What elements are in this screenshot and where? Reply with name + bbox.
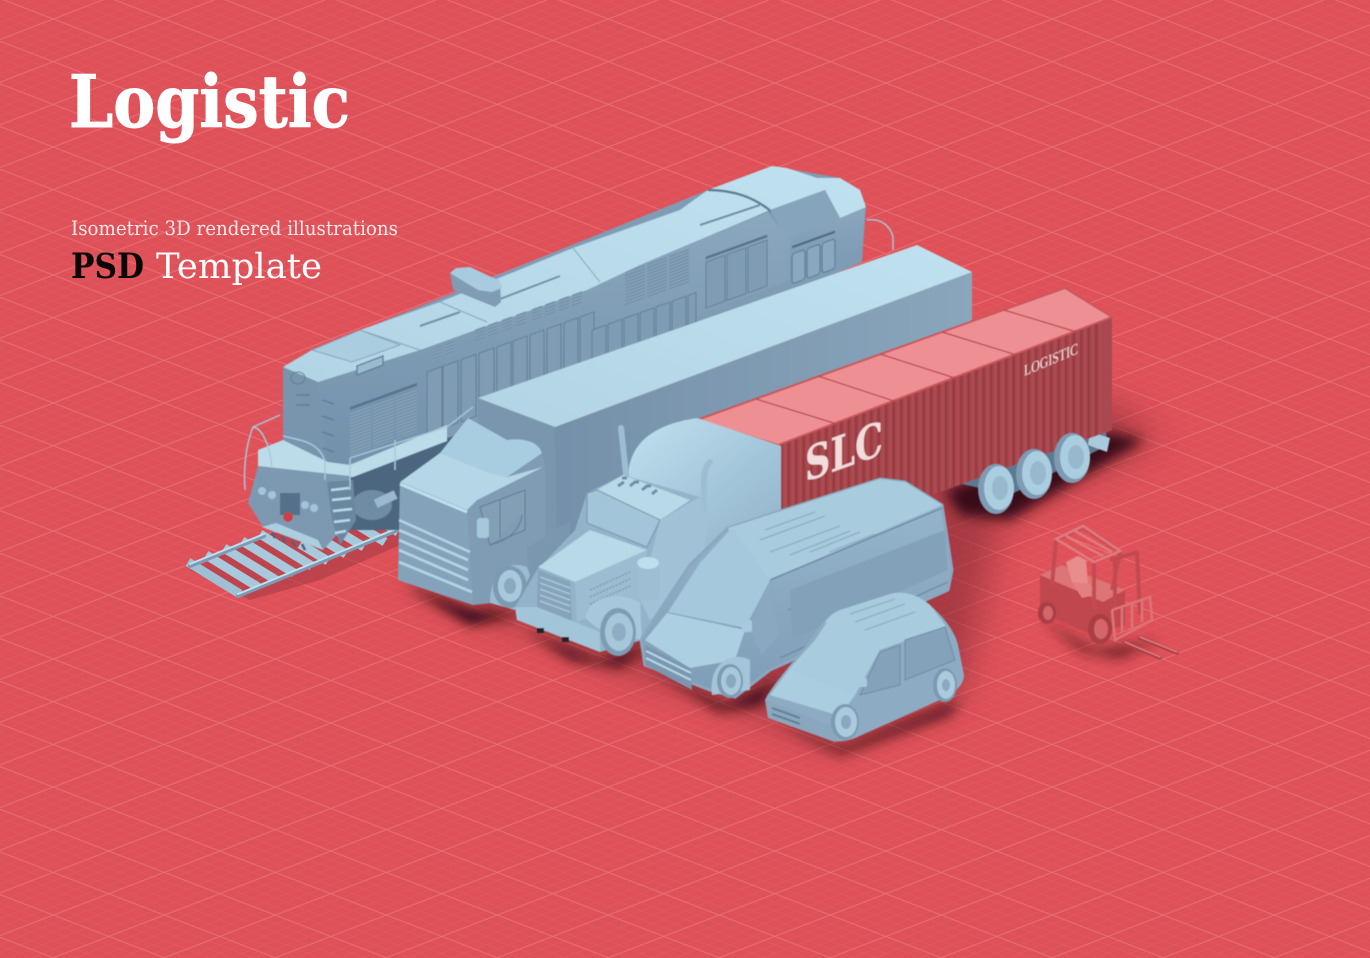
hood side bbox=[575, 550, 647, 622]
seat bbox=[1066, 556, 1098, 598]
mast bbox=[1110, 552, 1140, 625]
hood bbox=[538, 530, 647, 582]
windshield bbox=[790, 622, 880, 695]
chassis bbox=[1040, 565, 1125, 635]
track rails bbox=[190, 528, 398, 596]
cab side bbox=[640, 497, 708, 620]
fuel tank bbox=[637, 557, 659, 600]
cab fender and wheel bbox=[490, 565, 530, 610]
trailer side bbox=[555, 272, 972, 600]
loco front louvres bbox=[350, 383, 417, 456]
front bbox=[765, 700, 838, 742]
loco roof bbox=[283, 166, 866, 382]
cab front bbox=[398, 482, 473, 605]
wheel and fender bbox=[585, 596, 642, 656]
side panel highlight bbox=[790, 530, 948, 640]
cab visor bbox=[400, 484, 467, 512]
loco upper louvres bbox=[625, 249, 689, 306]
front wheel bbox=[1088, 614, 1112, 644]
cab backing silhouette bbox=[398, 418, 545, 605]
forklift bbox=[1038, 526, 1177, 658]
hood bbox=[770, 668, 855, 716]
loco cab windows bbox=[792, 231, 835, 284]
side windows and doors bbox=[860, 627, 955, 695]
side ridge bbox=[770, 508, 948, 658]
grille bbox=[537, 570, 572, 623]
heading: PSD Template: Template bbox=[156, 247, 322, 287]
loco mid doors bbox=[706, 235, 767, 308]
tractor sleeper cab bbox=[628, 418, 781, 600]
railway track bbox=[188, 515, 400, 600]
large van bbox=[641, 479, 952, 698]
canopy bbox=[1052, 527, 1120, 610]
windshield bbox=[587, 490, 660, 547]
trailer roof bbox=[478, 245, 972, 427]
loco door panels bbox=[427, 312, 594, 434]
cab side bbox=[467, 468, 545, 605]
wheels bbox=[831, 668, 957, 740]
loco exhaust housing bbox=[450, 267, 502, 307]
track sleepers bbox=[188, 516, 398, 594]
loco cab rear side bbox=[680, 207, 865, 312]
container truck bbox=[628, 288, 1112, 600]
container end post bbox=[1102, 317, 1112, 434]
bumper bbox=[515, 607, 600, 652]
container label: SLC: SLC bbox=[805, 410, 883, 494]
canopy top bars bbox=[1056, 526, 1120, 562]
container side bbox=[778, 317, 1112, 552]
loco pilot front bbox=[248, 466, 356, 550]
subtitle: Isometric 3D rendered illustrations bbox=[71, 217, 398, 240]
windshield bbox=[668, 528, 770, 628]
wheel bbox=[712, 657, 750, 698]
rear wheel bbox=[1038, 602, 1056, 624]
exhaust stacks bbox=[621, 428, 710, 530]
loco front face bbox=[283, 367, 328, 470]
cab mirror bbox=[477, 518, 489, 538]
container label: LOGISTIC: LOGISTIC bbox=[1024, 341, 1078, 380]
trailer wheels bbox=[978, 433, 1090, 514]
hood vents bbox=[590, 572, 630, 604]
loco undercarriage bbox=[340, 405, 560, 530]
title: Logistic bbox=[69, 59, 350, 144]
trailer axles bbox=[945, 425, 1110, 495]
container roof bbox=[697, 288, 1112, 445]
carriage bbox=[1112, 597, 1152, 640]
chassis bbox=[525, 522, 570, 595]
trailer front face bbox=[478, 398, 557, 560]
grille bbox=[645, 645, 692, 690]
loco front details bbox=[291, 356, 383, 452]
forks bbox=[1125, 637, 1177, 658]
cab roof bbox=[400, 453, 543, 510]
roof bbox=[825, 593, 946, 650]
loco lower doors bbox=[592, 293, 696, 360]
cab roof with lights bbox=[597, 475, 690, 520]
heading: PSD Template: PSD bbox=[71, 246, 144, 287]
box truck trailer bbox=[478, 245, 972, 600]
roof ribs bbox=[850, 599, 915, 630]
locomotive bbox=[245, 166, 893, 550]
loco roof vents bbox=[432, 291, 582, 361]
cab window lines bbox=[480, 490, 525, 545]
mirror bbox=[858, 678, 867, 687]
loco backing silhouette bbox=[258, 166, 866, 490]
ground shadows bbox=[400, 400, 1160, 755]
tractor backing silhouette bbox=[515, 475, 708, 652]
van body bbox=[641, 479, 952, 697]
van roof bbox=[728, 479, 942, 580]
cab-over truck bbox=[398, 418, 570, 610]
cab grille bbox=[399, 520, 472, 592]
deck bbox=[1040, 565, 1125, 602]
mirror bbox=[742, 620, 752, 632]
loco handrails bbox=[245, 220, 893, 490]
hood bbox=[645, 613, 745, 668]
loco side body bbox=[318, 213, 790, 470]
cab spoiler bbox=[440, 418, 542, 477]
bonneted tractor bbox=[515, 428, 710, 656]
body bbox=[765, 593, 964, 741]
roof ribs bbox=[760, 512, 875, 555]
walkway strip bbox=[258, 425, 447, 477]
small van bbox=[765, 593, 964, 742]
door window bbox=[750, 582, 778, 655]
